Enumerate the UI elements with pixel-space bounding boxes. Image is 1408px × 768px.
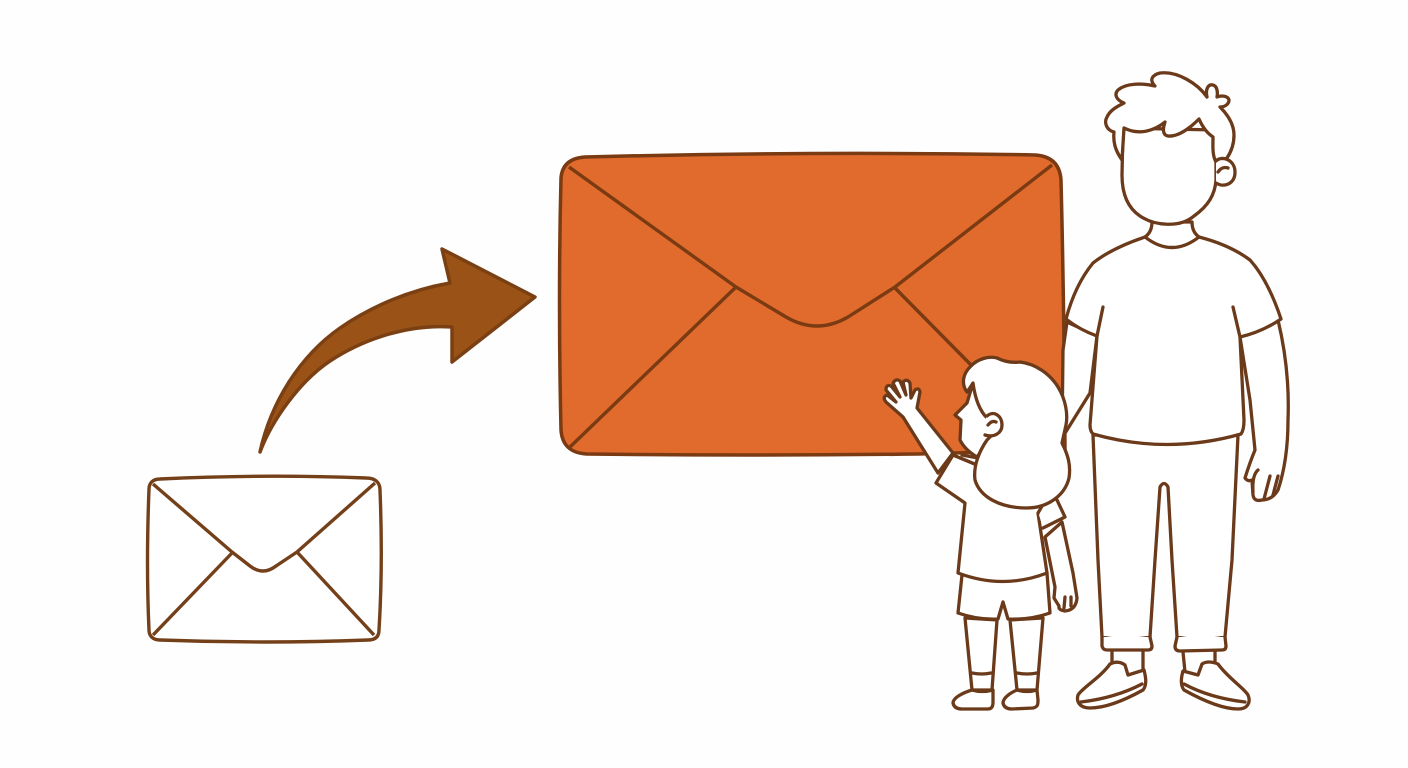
child legs	[965, 618, 997, 690]
adult right arm and hand	[1240, 320, 1288, 500]
adult left shoe	[1078, 662, 1146, 708]
figure: adult	[1062, 73, 1288, 709]
adult right shoe	[1181, 662, 1249, 709]
child face	[955, 383, 990, 457]
adult left arm	[1062, 322, 1097, 438]
arrow: curved brown arrow	[260, 249, 535, 452]
adult neck	[1145, 222, 1199, 248]
child right arm and hand	[1045, 522, 1077, 611]
adult trouser cuffs	[1102, 637, 1226, 651]
icon: small outlined envelope	[148, 476, 381, 642]
adult hair	[1106, 73, 1234, 162]
child raised arm and hand	[884, 380, 953, 473]
child sleeve	[1039, 495, 1065, 528]
adult face	[1122, 128, 1216, 224]
adult t-shirt	[1066, 237, 1281, 444]
child t-shirt	[936, 455, 1052, 582]
child shoes	[953, 690, 993, 709]
child collar	[953, 455, 978, 465]
adult ear	[1216, 158, 1235, 185]
child hair	[963, 357, 1070, 508]
child shorts	[958, 573, 1050, 619]
icon: large orange envelope	[560, 153, 1065, 455]
figure: child	[884, 357, 1077, 709]
child ear	[985, 413, 1002, 436]
adult socks	[1112, 652, 1215, 672]
adult trousers	[1093, 435, 1238, 640]
